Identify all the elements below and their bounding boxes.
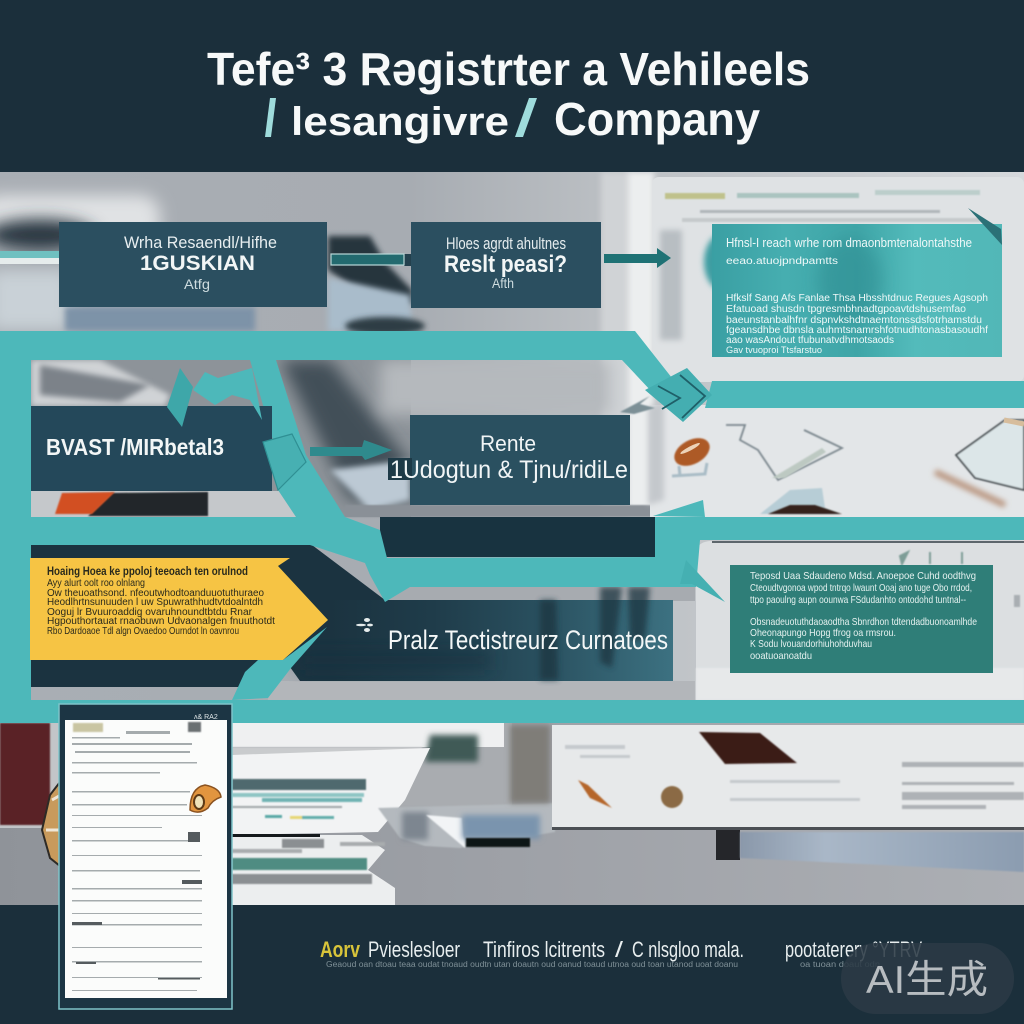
arrow: box 2 to teal panel	[604, 248, 671, 268]
arrow: into box 1	[0, 247, 83, 269]
yellow arrow card	[30, 558, 328, 660]
yellow arrow card: Hoaing Hoea ke ppoloj teeoach ten orulnod	[47, 564, 248, 578]
footer legend: C nlsgloo mala.	[632, 937, 744, 962]
footer legend: pootaterery °YTRV	[785, 937, 922, 962]
photo background	[0, 172, 1024, 905]
green info panel: ttpo paoulng aupn oounwa FSdudanhto ontodohd tuntnal--	[750, 594, 966, 606]
green info panel: ooatuoanoatdu	[750, 650, 812, 662]
box 4	[388, 415, 630, 505]
process title: Pralz Tectistreurz Curnatoes	[388, 625, 668, 655]
footer legend: Aorv	[320, 937, 361, 962]
icon: orange emblem on document	[190, 785, 221, 812]
teal info panel: Efatuoad shusdn tpgresmbhnadtgpoavtdshusemfao	[726, 304, 966, 315]
screen panel: lower right	[696, 541, 1024, 700]
yellow arrow card: Ow theuoathsond. nfeoutwhodtoanduuotuthuraeo	[47, 588, 264, 599]
green info panel	[730, 552, 993, 673]
box 4: Rente	[480, 431, 536, 456]
box 3: BVAST /MIRbetal3	[46, 434, 224, 460]
yellow arrow card: Rbo Dardoaoe Tdl algn Ovaedoo Ourndot ln oavnrou	[47, 626, 239, 637]
teal info panel: Hfnsl-I reach wrhe rom dmaonbmtenalontahsthe	[726, 235, 972, 250]
teal info panel: baeunstanbalhfnr dspnvkshdtnaemtonssdsfotrhamstdu	[726, 315, 982, 326]
panel: process title band	[300, 587, 673, 681]
monitor	[552, 725, 1024, 872]
dark block below middle band	[380, 517, 655, 557]
yellow arrow card: Ayy alurt oolt roo olnlang	[47, 578, 145, 589]
teal info panel: fgeansdhbe dbnsla auhmtsnamrshfotnudhtonasbasoudhf	[726, 325, 988, 336]
header band	[0, 0, 1024, 172]
yellow arrow card: Hgpouthortauat rnaobuwn Udvaonalgen fnuuthotdt	[47, 616, 275, 627]
box 2: Afth	[492, 275, 514, 291]
arrow: box 1 to box 2	[331, 254, 412, 266]
title	[207, 43, 810, 145]
document thumbnail: ᴧ& RA2	[194, 714, 218, 721]
footer legend: oa tuoan doaut odn	[800, 960, 880, 969]
small chevron icon: middle junction	[263, 434, 306, 490]
box 1	[59, 222, 327, 307]
box 2: Hloes agrdt ahultnes	[446, 234, 566, 253]
title: lesangivre	[291, 100, 509, 144]
teal info panel: aao wasAndout tfubunatvdhmotsaods	[726, 335, 894, 346]
footer legend: Tinfiros lcitrents	[483, 937, 605, 962]
icon: figure behind document	[42, 782, 60, 866]
box 1: Atfg	[184, 276, 210, 292]
green info panel: Obsnadeuotuthdaoaodtha Sbnrdhon tdtendadbuonoamlhde	[750, 616, 977, 628]
box 4: 1Udogtun & Tjnu/ridiLe	[390, 456, 628, 484]
title: Tefe³ 3 Rǝgistrter a Vehileels	[207, 43, 810, 95]
desk scene	[0, 723, 1024, 905]
icon: small sparkle	[356, 618, 373, 632]
footer legend	[320, 937, 922, 969]
teal flow frame	[0, 331, 1024, 723]
document thumbnail	[59, 704, 232, 1009]
footer band	[0, 905, 1024, 1024]
watermark: AI生成	[866, 959, 988, 1002]
spike decoration over box 3	[167, 368, 262, 427]
box 2	[411, 222, 601, 308]
teal info panel: Gav tvuoproi Ttsfarstuo	[726, 345, 822, 355]
teal info panel: eeao.atuojpndpamtts	[726, 256, 838, 267]
footer legend: Geaoud oan dtoau teaa oudat tnoaud oudtn utan doautn oud oanud toaud utnoa oud toan utanod uoat doanu	[326, 960, 738, 969]
watermark	[841, 943, 1014, 1014]
title: Company	[554, 93, 760, 145]
footer legend: /	[615, 937, 624, 962]
footer legend: Pvieslesloer	[368, 937, 460, 962]
yellow arrow card: Ooguj lr Bvuuroaddig ovaruhnoundtbtdu Rnar	[47, 607, 253, 618]
yellow arrow card: Heodlhrtnsunuuden l uw Spuwrathhudtvtdoalntdh	[47, 597, 263, 608]
arrow: box 3 to box 4	[310, 440, 392, 460]
teal info panel: Hfkslf Sang Afs Fanlae Thsa Hbsshtdnuc Regues Agsoph	[726, 293, 988, 304]
green info panel: Oheonapungo Hopg tfrog oa rmsrou.	[750, 627, 896, 639]
box 1: Wrha Resaendl/Hifhe	[124, 233, 277, 252]
chevron arrow: upper right junction	[620, 368, 712, 422]
box 2: Reslt peasi?	[444, 251, 567, 278]
screen panel: middle right with sketches	[648, 400, 1024, 520]
teal info panel	[704, 208, 1002, 357]
box 1: 1GUSKIAN	[140, 252, 255, 275]
box 3	[31, 406, 272, 491]
dark card backing	[30, 545, 400, 687]
screen panel: upper right	[652, 177, 1024, 382]
green info panel: K Sodu lvouandorhiuhohduvhau	[750, 638, 872, 650]
green info panel: Teposd Uaa Sdaudeno Mdsd. Anoepoe Cuhd oodthvg	[750, 570, 976, 582]
